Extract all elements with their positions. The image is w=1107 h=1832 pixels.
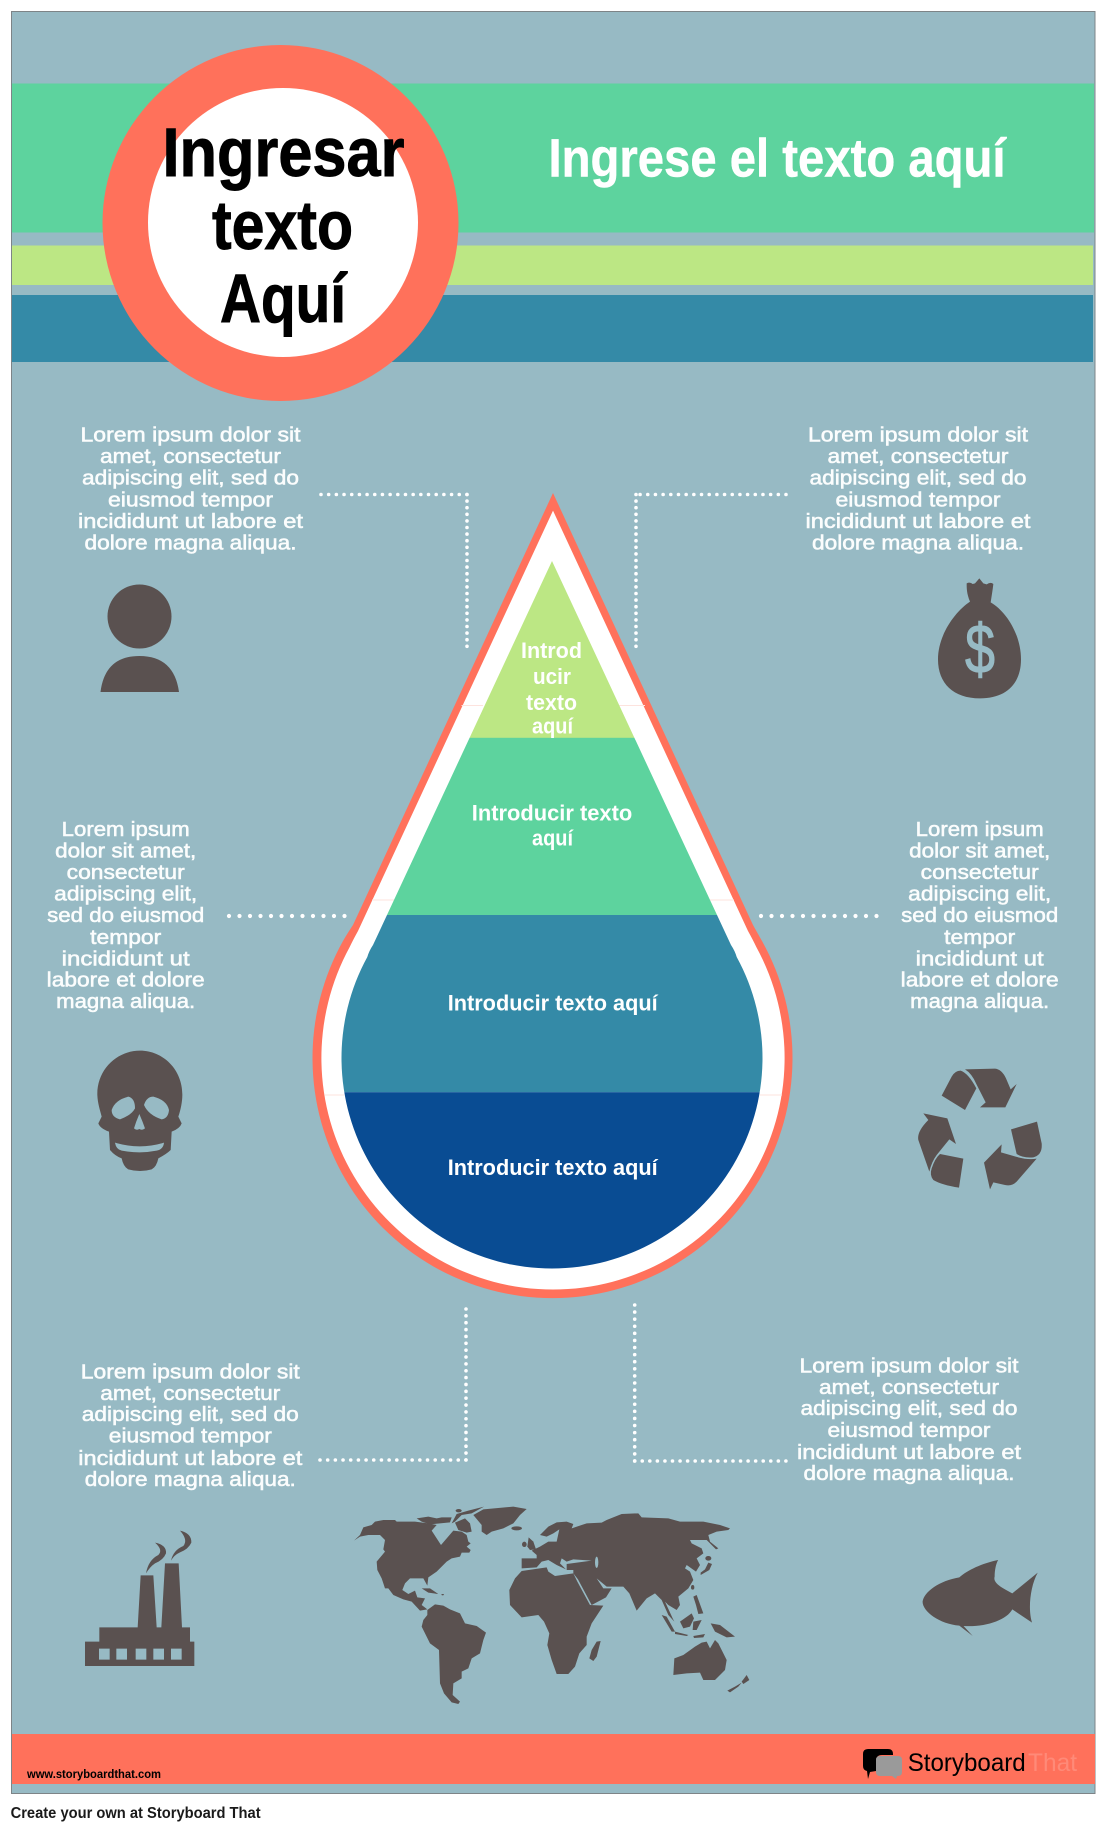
icon: factory xyxy=(85,1531,194,1666)
band: green header xyxy=(12,84,1094,232)
text block: bottom left: eiusmod tempor xyxy=(109,1425,272,1448)
text block: bottom left: incididunt ut labore et xyxy=(78,1447,303,1470)
eurasia xyxy=(522,1513,730,1622)
text block: top left xyxy=(78,424,303,554)
text block: bottom left xyxy=(78,1360,303,1491)
british isles xyxy=(527,1537,536,1550)
text block: middle right: magna aliqua. xyxy=(910,990,1049,1013)
level 2 label: Introducir texto xyxy=(472,801,632,826)
text block: top left: dolore magna aliqua. xyxy=(84,532,296,554)
text block: bottom right: incididunt ut labore et xyxy=(797,1441,1021,1464)
text block: middle right: consectetur xyxy=(921,861,1039,884)
text block: middle right: tempor xyxy=(944,926,1015,949)
title badge xyxy=(102,45,458,401)
text block: top left: Lorem ipsum dolor sit xyxy=(80,424,301,446)
text block: bottom right: Lorem ipsum dolor sit xyxy=(800,1354,1019,1377)
text block: middle right: dolor sit amet, xyxy=(909,840,1050,862)
text block: bottom left: adipiscing elit, sed do xyxy=(82,1403,299,1426)
southeast asia islands xyxy=(662,1615,675,1632)
text block: middle left xyxy=(47,818,205,1013)
arctic islands xyxy=(417,1517,452,1524)
text block: middle left: adipiscing elit, xyxy=(54,882,197,906)
caribbean islands xyxy=(422,1588,438,1594)
text block: top right xyxy=(806,424,1031,554)
south america xyxy=(422,1604,486,1704)
level 1 label: aquí xyxy=(532,714,574,738)
text block: bottom right: amet, consectetur xyxy=(819,1376,999,1399)
icon: person xyxy=(100,584,179,692)
greenland and iceland xyxy=(473,1507,527,1535)
icon: skull xyxy=(97,1051,182,1171)
connector: bottom left dotted xyxy=(320,1309,466,1460)
text block: bottom left: Lorem ipsum dolor sit xyxy=(81,1360,300,1383)
connector: middle left dotted xyxy=(229,914,345,918)
level 4 label: Introducir texto aquí xyxy=(448,1155,659,1180)
text block: top right: amet, consectetur xyxy=(828,445,1009,468)
text block: bottom right: eiusmod tempor xyxy=(828,1419,991,1442)
africa xyxy=(509,1567,603,1674)
text block: top right: incididunt ut labore et xyxy=(806,510,1031,533)
credit line: Create your own at Storyboard That xyxy=(11,1805,261,1822)
logo: storyboard that xyxy=(863,1749,1077,1779)
text block: bottom right xyxy=(797,1354,1021,1485)
text block: top left: eiusmod tempor xyxy=(108,488,273,512)
connector: middle right dotted xyxy=(761,914,877,918)
north america xyxy=(354,1520,471,1611)
text block: middle right: incididunt ut xyxy=(916,948,1044,970)
text block: bottom left: dolore magna aliqua. xyxy=(85,1468,296,1491)
australia xyxy=(673,1640,727,1680)
japan and sakhalin xyxy=(701,1563,712,1575)
text block: top right: dolore magna aliqua. xyxy=(812,532,1024,554)
icon: money bag: $ xyxy=(965,610,995,688)
text block: middle left: dolor sit amet, xyxy=(55,840,196,862)
level 2 label: aquí xyxy=(532,826,574,851)
text block: bottom right: adipiscing elit, sed do xyxy=(800,1397,1018,1420)
title badge: Aquí xyxy=(220,260,348,337)
level 1 label: Introd xyxy=(521,638,582,663)
text block: middle right: labore et dolore xyxy=(901,968,1059,992)
text block: bottom right: dolore magna aliqua. xyxy=(804,1462,1014,1485)
level 1 label: ucir xyxy=(533,664,571,689)
text block: top left: incididunt ut labore et xyxy=(78,510,303,533)
connector: top left dotted xyxy=(321,494,467,647)
text block: middle right: adipiscing elit, xyxy=(908,882,1051,906)
text block: middle left: incididunt ut xyxy=(62,948,190,970)
text block: top right: Lorem ipsum dolor sit xyxy=(808,424,1028,446)
new zealand xyxy=(727,1683,742,1692)
icon: fish xyxy=(923,1560,1038,1636)
band: light green xyxy=(12,246,1093,285)
text block: top left: amet, consectetur xyxy=(100,445,281,468)
text block: top right: eiusmod tempor xyxy=(836,488,1001,512)
icon: recycle xyxy=(918,1069,1042,1189)
text block: middle left: Lorem ipsum xyxy=(62,818,190,841)
madagascar xyxy=(589,1641,601,1661)
text block: middle left: consectetur xyxy=(67,861,185,884)
text block: top right: adipiscing elit, sed do xyxy=(810,466,1026,490)
title badge: Ingresar xyxy=(162,114,404,191)
icon: world map xyxy=(354,1507,749,1704)
text block: middle left: labore et dolore xyxy=(47,968,205,992)
text block: middle right xyxy=(901,818,1059,1013)
connector: top right dotted xyxy=(636,494,786,652)
level 1 label: texto xyxy=(526,690,577,715)
logo: storyboard that: Storyboard xyxy=(908,1749,1026,1777)
logo: storyboard that: That xyxy=(1028,1749,1077,1777)
icon: money bag xyxy=(938,578,1021,698)
chart: drop pyramid xyxy=(312,493,792,1298)
text block: middle right: Lorem ipsum xyxy=(916,818,1044,841)
level 2 label xyxy=(472,801,632,851)
text block: middle left: tempor xyxy=(90,926,161,949)
band: blue xyxy=(12,295,1093,362)
heading: header right: Ingrese el texto aquí xyxy=(548,128,1007,188)
footer url: www.storyboardthat.com xyxy=(26,1769,161,1781)
level 1 label xyxy=(521,638,582,738)
text block: middle right: sed do eiusmod xyxy=(901,904,1058,927)
level 3 label: Introducir texto aquí xyxy=(448,990,659,1015)
text block: middle left: sed do eiusmod xyxy=(47,904,204,927)
text block: top left: adipiscing elit, sed do xyxy=(82,466,299,490)
text block: middle left: magna aliqua. xyxy=(56,990,195,1013)
title badge: texto xyxy=(212,187,353,264)
connector: bottom right dotted xyxy=(635,1305,786,1461)
footer band xyxy=(12,1734,1095,1784)
text block: bottom left: amet, consectetur xyxy=(100,1382,280,1405)
